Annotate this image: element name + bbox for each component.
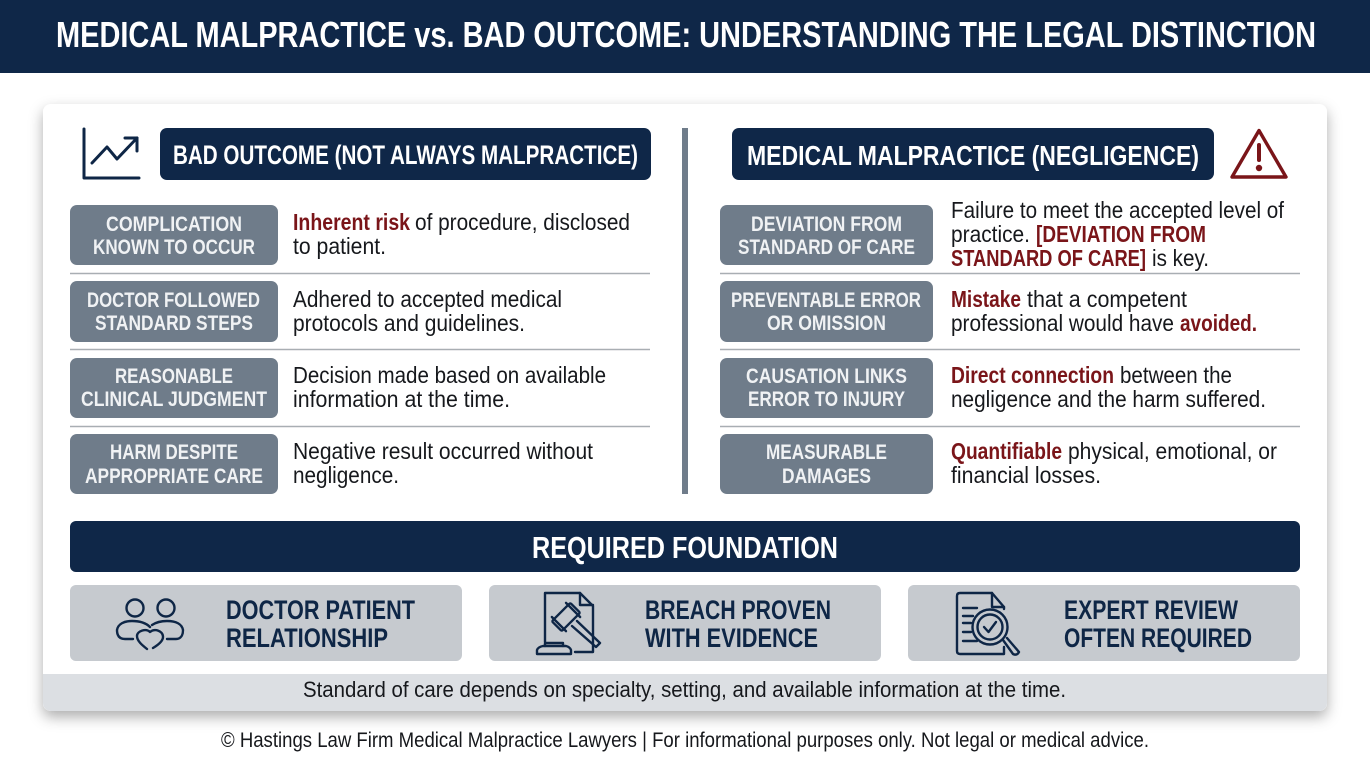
icon: gavel on document [537,593,600,654]
heading: required foundation: REQUIRED FOUNDATION [532,530,838,565]
row: measurable damages: physical, emotional, or [1068,438,1277,464]
row: deviation from standard of care: STANDARD OF CARE [738,236,915,259]
foundation card: breach proven with evidence: WITH EVIDENCE [645,623,818,653]
foundation card: expert review often required [908,585,1300,661]
icon: two people with heart [117,600,183,649]
row: reasonable clinical judgment: CLINICAL JUDGMENT [81,388,267,411]
row: deviation from standard of care: STANDARD OF CARE] [951,245,1146,271]
heading: medical malpractice: MEDICAL MALPRACTICE (NEGLIGENCE) [747,140,1199,171]
heading: medical malpractice [732,128,1214,180]
row: complication known to occur: COMPLICATION [106,213,242,236]
row: preventable error or omission [720,281,1257,342]
row: complication known to occur [70,205,630,265]
panel: required foundation [70,521,1300,661]
row: harm despite appropriate care [70,434,594,494]
foundation card: doctor patient relationship [70,585,462,661]
icon: trending line chart [84,129,139,178]
row: preventable error or omission: Mistake [951,286,1021,312]
row: doctor followed standard steps: Adhered to accepted medical [293,286,562,312]
row: causation links error to injury: between the [1120,362,1232,388]
panel: bad outcome [70,128,651,494]
row: causation links error to injury: ERROR TO INJURY [748,388,905,411]
row: complication known to occur: to patient. [293,233,386,259]
row: doctor followed standard steps: DOCTOR FOLLOWED [87,289,260,312]
row: harm despite appropriate care: HARM DESPITE [110,441,238,464]
row: measurable damages: financial losses. [951,462,1101,488]
foundation card: expert review often required: OFTEN REQUIRED [1064,623,1252,653]
row: measurable damages [720,434,1277,494]
row: measurable damages: DAMAGES [782,465,871,488]
row: measurable damages: Quantifiable [951,438,1062,464]
row: causation links error to injury [720,358,1266,418]
row: causation links error to injury: negligence and the harm suffered. [951,386,1266,412]
icon: document with magnifier [957,593,1019,655]
foundation card: breach proven with evidence: BREACH PROVEN [645,595,831,625]
icon: warning triangle [1232,130,1286,177]
heading: required foundation [70,521,1300,572]
row: preventable error or omission: professional would have [951,310,1174,336]
row: deviation from standard of care: Failure to meet the accepted level of [951,197,1285,223]
row: deviation from standard of care: practice. [951,221,1030,247]
row: preventable error or omission: avoided. [1180,310,1257,336]
row: measurable damages: MEASURABLE [766,441,887,464]
row: reasonable clinical judgment [70,358,606,418]
row: doctor followed standard steps: protocols and guidelines. [293,310,525,336]
row: doctor followed standard steps: STANDARD STEPS [95,312,253,335]
foundation card: breach proven with evidence [489,585,881,661]
row: reasonable clinical judgment: information at the time. [293,386,510,412]
foundation card: doctor patient relationship: RELATIONSHIP [226,623,388,653]
row: complication known to occur: Inherent risk [293,209,410,235]
heading: bad outcome [160,128,651,180]
row: preventable error or omission: PREVENTABLE ERROR [731,289,921,312]
main card [43,104,1327,711]
header banner [0,0,1370,73]
heading: bad outcome: BAD OUTCOME (NOT ALWAYS MALPRACTICE) [173,140,638,170]
row: deviation from standard of care: [DEVIATION FROM [1036,221,1206,247]
row: deviation from standard of care: is key. [1152,245,1209,271]
row: reasonable clinical judgment: REASONABLE [115,365,233,388]
panel: medical malpractice [720,128,1286,494]
note strip [43,674,1327,711]
row: deviation from standard of care [720,197,1285,271]
row: reasonable clinical judgment: Decision made based on available [293,362,606,388]
note strip: Standard of care depends on specialty, setting, and available information at the time. [303,677,1066,702]
row: harm despite appropriate care: Negative result occurred without [293,438,594,464]
foundation card: expert review often required: EXPERT REVIEW [1064,595,1238,625]
row: causation links error to injury: CAUSATION LINKS [746,365,907,388]
row: preventable error or omission: OR OMISSION [767,312,886,335]
row: doctor followed standard steps [70,281,562,342]
row: harm despite appropriate care: negligence. [293,462,399,488]
foundation card: doctor patient relationship: DOCTOR PATIENT [226,595,415,625]
row: causation links error to injury: Direct connection [951,362,1114,388]
row: complication known to occur: KNOWN TO OCCUR [93,236,255,259]
row: complication known to occur: of procedure, disclosed [415,209,630,235]
footer credit: © Hastings Law Firm Medical Malpractice Lawyers | For informational purposes only. Not legal or medical advice. [221,728,1149,752]
row: harm despite appropriate care: APPROPRIATE CARE [85,465,263,488]
row: preventable error or omission: that a competent [1027,286,1188,312]
row: deviation from standard of care: DEVIATION FROM [751,213,902,236]
